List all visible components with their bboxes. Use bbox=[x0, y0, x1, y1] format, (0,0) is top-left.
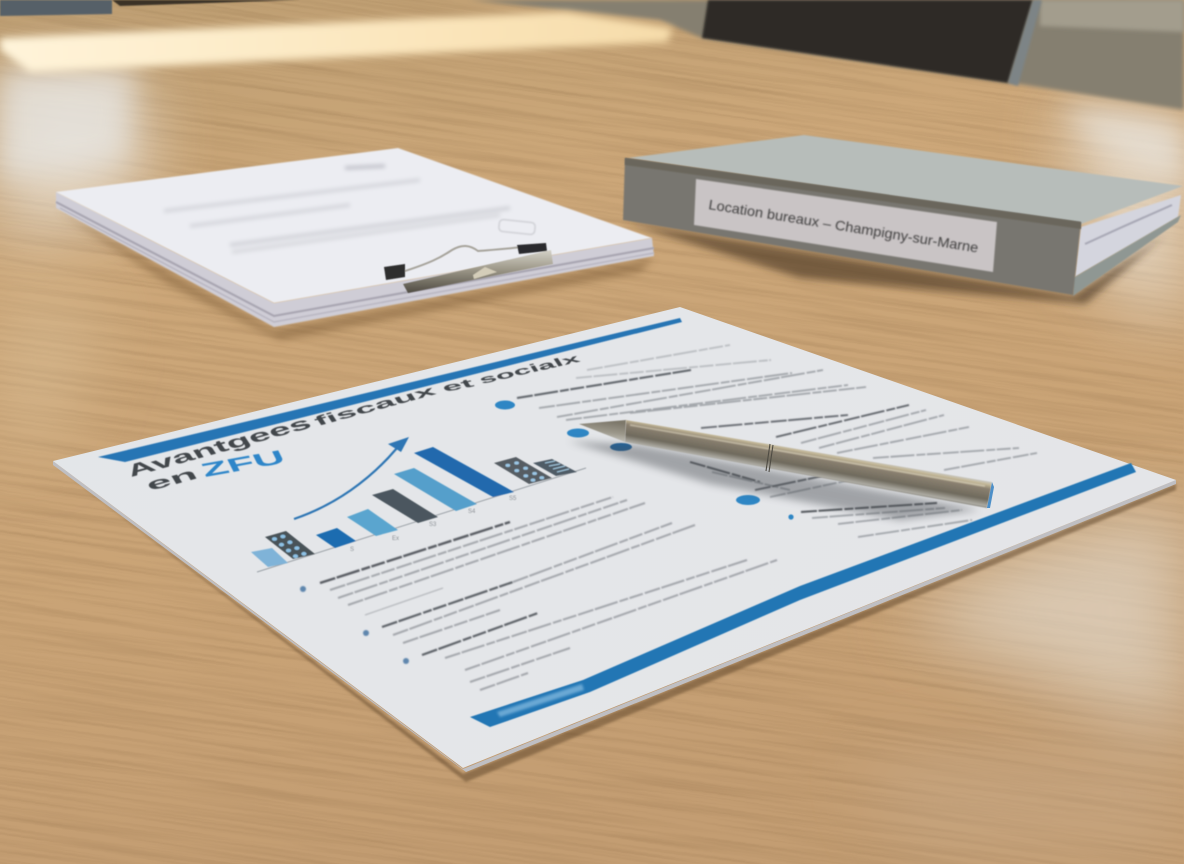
bars bbox=[316, 447, 514, 548]
sunlight patch on table bbox=[0, 12, 672, 72]
axis labels: S4 bbox=[468, 509, 476, 515]
spine label bbox=[694, 179, 997, 272]
top blue band bbox=[98, 318, 682, 462]
axis labels: S bbox=[350, 547, 354, 553]
pen shadow bbox=[568, 441, 980, 520]
bottom blue band bbox=[470, 463, 1136, 727]
title: Avantgees bbox=[122, 413, 315, 480]
sheet surface bbox=[53, 307, 1176, 768]
sheet thickness bbox=[53, 461, 1176, 772]
band caption bar bbox=[497, 684, 584, 717]
axis labels: S3 bbox=[429, 522, 437, 528]
label text: Location bureaux – Champigny-sur-Marne bbox=[708, 196, 980, 256]
left column bullets bbox=[300, 586, 409, 664]
bar chart with buildings and growth arrow bbox=[251, 437, 586, 572]
metal clip bbox=[384, 243, 553, 293]
right column: blurred text blocks bbox=[517, 345, 1037, 537]
pen tip cone bbox=[579, 420, 626, 442]
pen end cap bbox=[987, 482, 994, 508]
axis labels bbox=[350, 496, 517, 553]
bottom cover edge bbox=[1073, 215, 1181, 296]
clipped document stack bbox=[56, 148, 654, 327]
left buildings icon bbox=[251, 531, 315, 567]
grey ring binder bbox=[623, 135, 1183, 296]
silver ballpoint pen bbox=[579, 420, 994, 508]
main infographic sheet bbox=[53, 307, 1176, 772]
right column numbered bullets bbox=[495, 400, 794, 520]
title bbox=[122, 352, 583, 495]
binder top cover bbox=[628, 135, 1183, 224]
title: fiscaux bbox=[311, 383, 440, 429]
blurred lines of text bbox=[164, 166, 510, 252]
shadows of clipped papers and binder bbox=[56, 210, 1165, 340]
page block bbox=[1075, 195, 1181, 277]
axis labels: Ex bbox=[392, 536, 399, 542]
stack side edge bbox=[56, 192, 654, 327]
right buildings icon bbox=[494, 457, 577, 484]
title: en bbox=[142, 465, 201, 495]
axis labels: S5 bbox=[509, 496, 517, 502]
stamp outline bbox=[498, 219, 536, 235]
title: ZFU bbox=[197, 447, 289, 481]
left column: blurred text blocks bbox=[320, 497, 777, 690]
spine bbox=[623, 158, 1081, 295]
barrel highlight bbox=[630, 425, 985, 486]
pen barrel bbox=[625, 420, 992, 508]
growth arrow bbox=[294, 437, 409, 519]
title: et bbox=[439, 376, 478, 395]
top sheet bbox=[56, 148, 652, 303]
title: socialx bbox=[476, 352, 583, 386]
background: room behind table bbox=[0, 0, 1184, 110]
chair bbox=[702, 0, 1042, 86]
centre ring bbox=[766, 444, 773, 472]
main document shadow bbox=[53, 464, 1176, 782]
